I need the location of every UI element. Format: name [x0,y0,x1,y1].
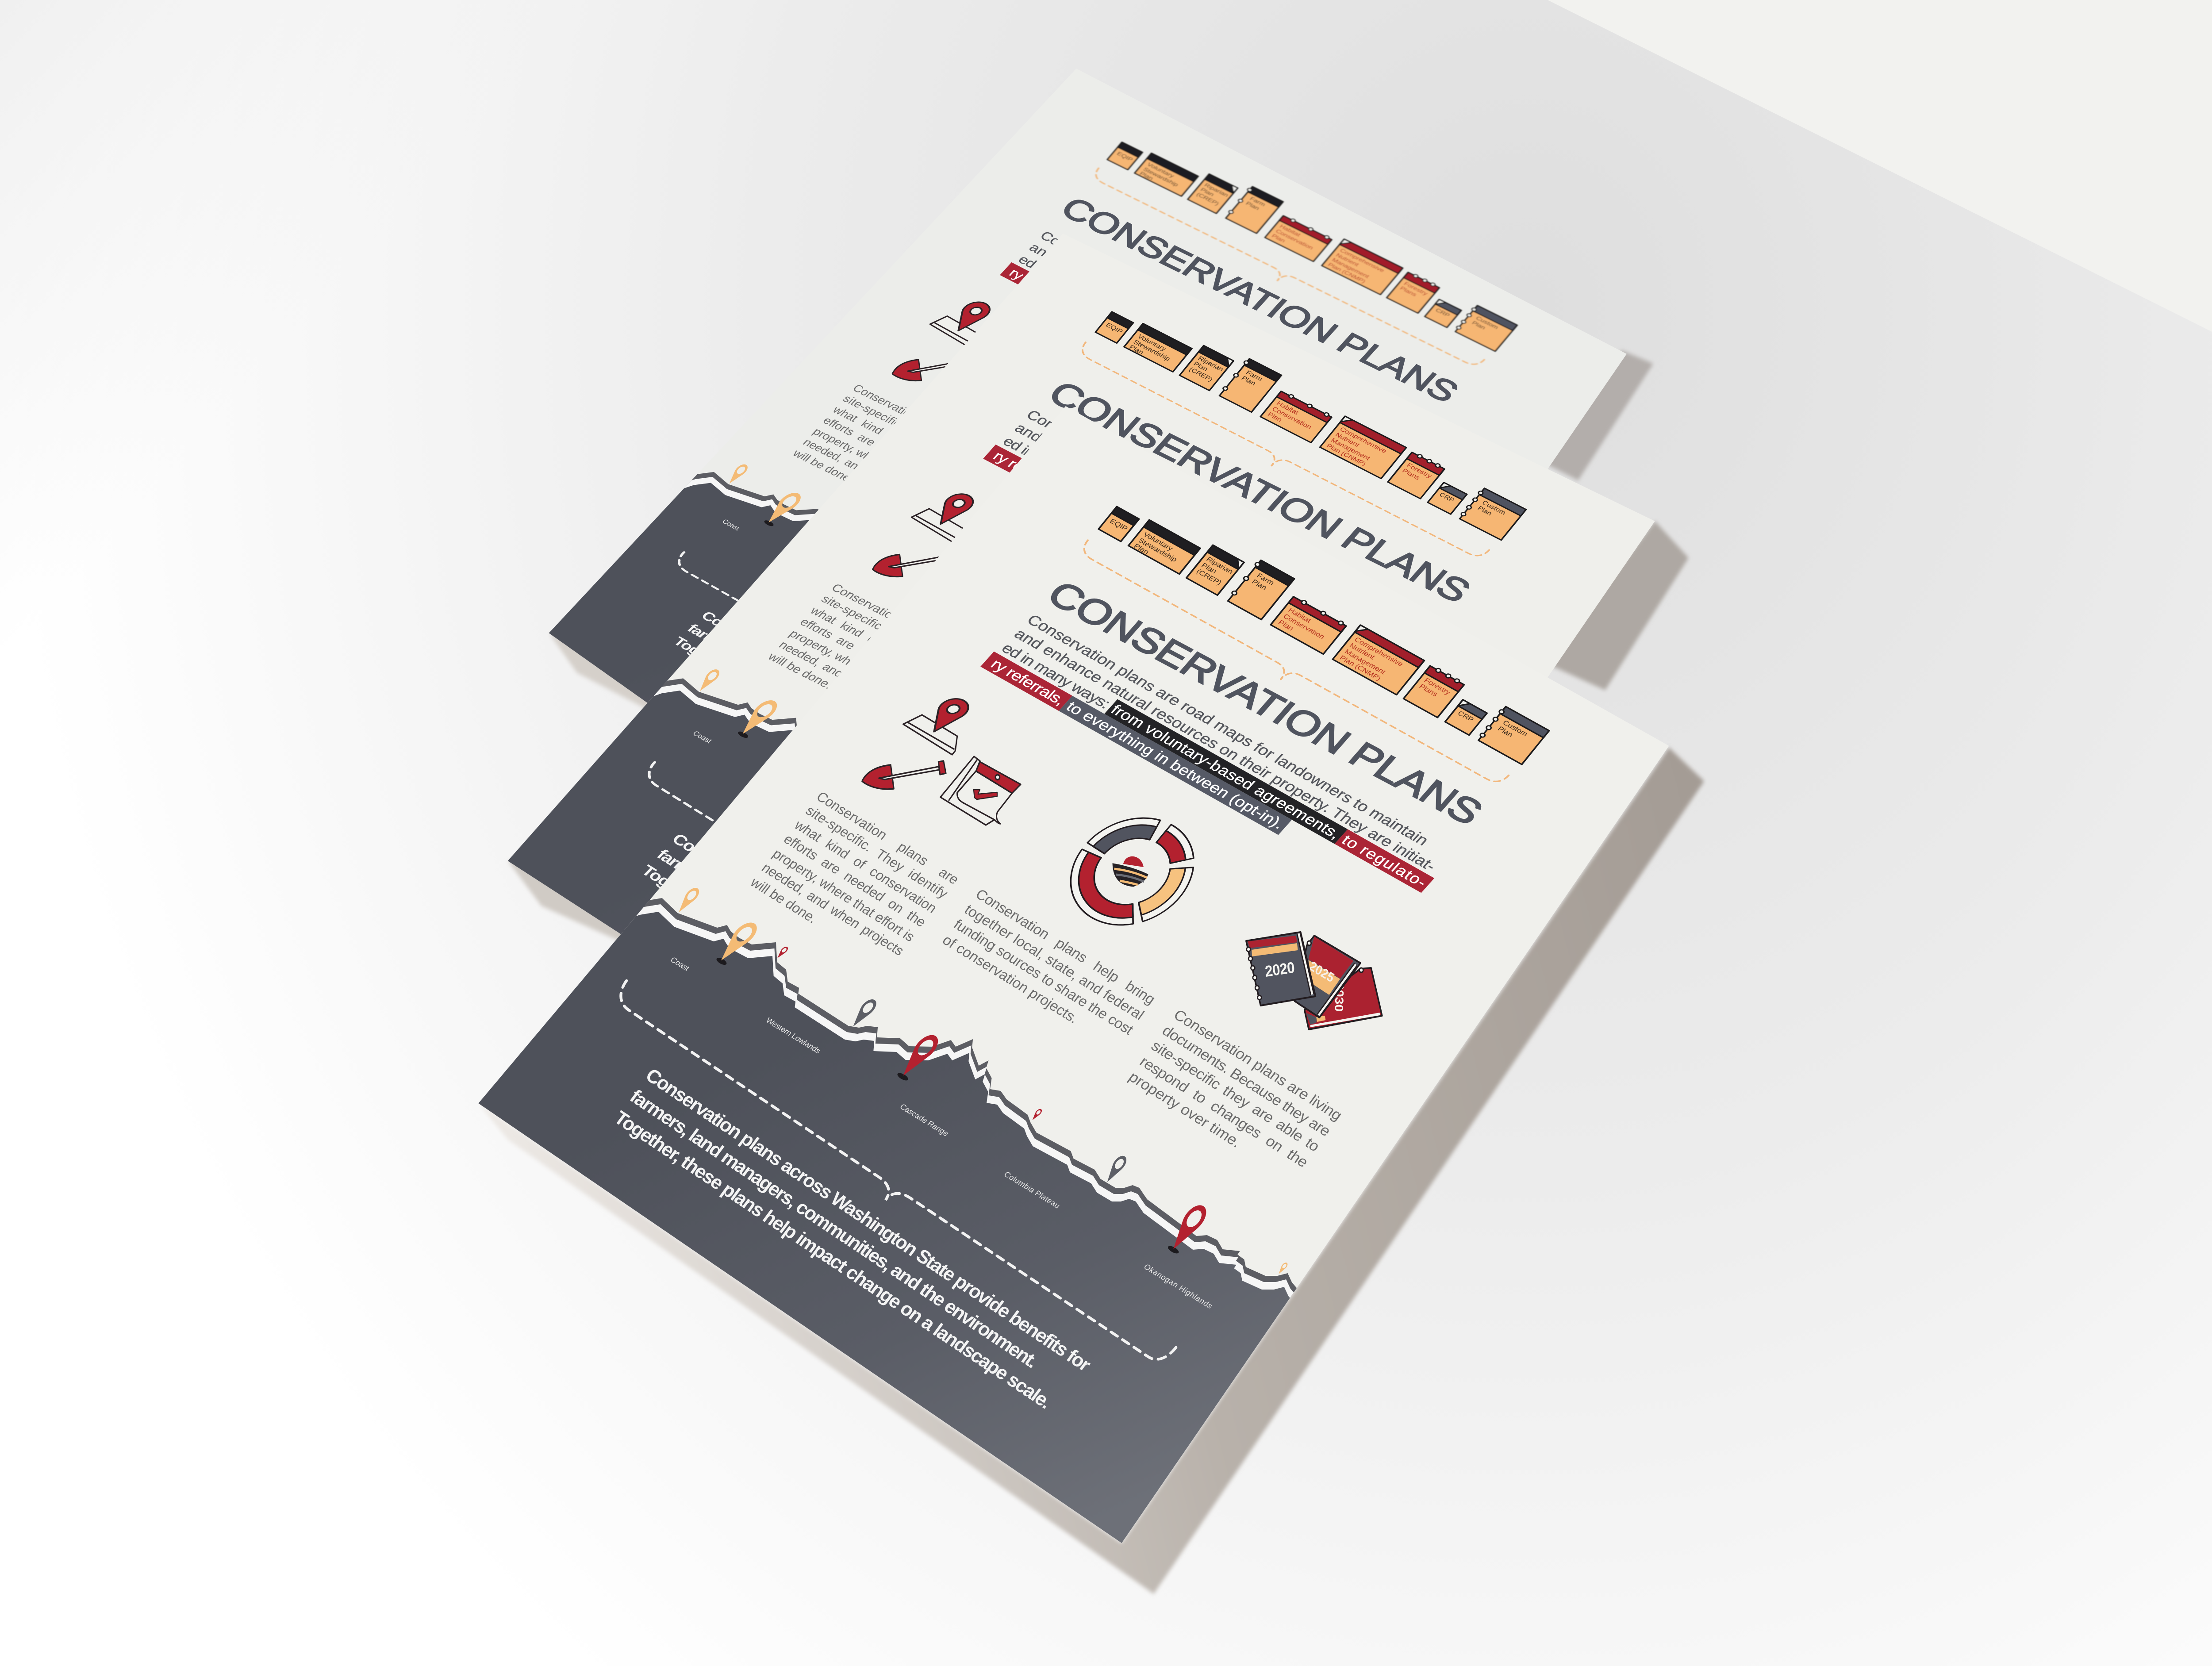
dashed bracket and closing text: farmers, land managers, communities, and the environment. [684,622,1057,835]
column three text: Conservation plans are living [1171,1006,1345,1124]
intro text: ry referrals, [990,449,1068,496]
plan documents: Comprehensive [1339,247,1386,273]
intro text: ed in many ways: [1015,252,1121,312]
column one text: what kind of conservation [807,604,951,682]
plan documents: Custom [1501,719,1529,738]
plan documents: CRP [1438,491,1456,504]
plan documents: Plans [1417,683,1440,698]
plan documents: Forestry [1405,462,1433,480]
column one text: efforts are needed on the [820,414,956,487]
column three text: site-specific they are able to [1148,1037,1323,1155]
plan documents: Conservation [1271,406,1313,430]
dashed bracket and closing text: farmers, land managers, communities, and the environment. [626,1086,1042,1372]
plan documents: Habitat [1275,400,1300,416]
stacked plan books icon: 2025 [1307,959,1336,986]
plan documents: Management [1331,257,1371,279]
dashed bracket and closing text: farmers, land managers, communities, and the environment. [653,846,1052,1099]
column one text: property, where that effort is [787,627,929,705]
plan documents: Riparian [1196,355,1225,373]
plan documents: Farm [1244,369,1264,383]
column one text [747,788,962,973]
plan documents: CRP [1456,709,1475,723]
plan documents: EQIP [1104,322,1124,335]
mountain band with map pins and region labels: Coast [669,955,691,973]
plan documents: Plan [1471,320,1487,330]
plan documents: (CREP) [1187,366,1214,383]
mountain band: Coast [721,518,741,532]
panel: middle poster [508,239,1655,934]
icons [872,491,1022,610]
mountain band with map pins and region labels [388,886,1370,1562]
intro text with highlights: ed in many ways: [998,640,1114,712]
stacked plan books icon: 2030 [1332,982,1346,1012]
intro text: and enhance natural resources on their property. They are initiat- [1026,240,1416,447]
dashed bracket and closing text: Together, these plans help impact change on a landscape scale. [670,634,1069,862]
plan documents: Plan [1244,200,1261,211]
intro text: ry referrals, [1006,266,1080,310]
plan documents: Habitat [1286,606,1313,624]
intro text: ed in many ways: [1000,434,1111,499]
mountain band [414,667,1394,1270]
column one text: needed, and when projects [800,436,937,508]
plan documents: Plan [1271,233,1287,243]
column three text: documents. Because they are [1159,1022,1334,1140]
intro text with highlights: to everything in between (opt-in). [1063,698,1288,832]
plan documents: Habitat [1279,223,1302,238]
column one text: property, where that effort is [769,846,918,944]
icons: stamp pin, shovel, calendar [862,695,1021,825]
column two text: Conservation plans help bring [973,886,1159,1007]
plan documents: Farm [1248,196,1267,207]
column one text: will be done. [790,447,857,485]
plan documents: Plan [1496,725,1515,738]
plan documents: (CREP) [1195,568,1223,587]
column one text: will be done. [765,650,836,691]
plan documents [1069,295,1531,571]
intro text: Conservation plans are road maps for landowners to maintain [1023,407,1419,621]
plan documents: Nutrient [1335,252,1360,268]
plan documents: Plans [1399,285,1418,298]
dashed bracket and closing text: Together, these plans help impact change on a landscape scale. [610,1107,1056,1413]
plan documents: Plan [1199,187,1215,197]
plan documents: Plan [1128,344,1145,356]
column one text: property, where that effort is [810,426,946,498]
plan documents: EQIP [1108,517,1129,532]
column one text [790,382,987,520]
intro text: Conservation plans are road maps for landowners to maintain [1037,228,1409,426]
donut chart icon [1046,800,1218,943]
plan documents: Plan [1132,542,1151,556]
plan documents: CRP [1434,307,1452,318]
plan documents: Forestry [1422,676,1452,696]
plan documents: Riparian [1203,182,1230,198]
plan documents: Plan [1240,375,1257,387]
panel: front poster [388,406,1669,1562]
icons [892,299,1038,412]
intro text with highlights: from voluntary-based agreements, [1107,701,1344,842]
plan documents: Stewardship [1137,537,1179,563]
column one text: will be done. [747,874,820,926]
plan documents: EQIP [1116,150,1134,162]
plan documents: Voluntary [1136,333,1167,353]
plan documents: Comprehensive [1353,636,1405,668]
title: CONSERVATION PLANS [1041,375,1479,610]
plan documents: (CREP) [1195,191,1221,207]
plan documents: Plan (CNMP) [1327,261,1367,284]
plan documents: Voluntary [1142,530,1175,553]
plan documents: Forestry [1403,280,1429,296]
column three text: respond to changes on the [1137,1053,1311,1171]
plan documents: Management [1329,437,1372,462]
column one text: needed, and when projects [759,860,907,959]
plan documents: Farm [1255,572,1276,587]
plan documents: Plan (CNMP) [1338,654,1382,682]
plan documents: Plan (CNMP) [1325,442,1367,468]
plan documents [1070,488,1555,798]
column three text [1125,1006,1345,1186]
mountain band with map pins and region labels: Okanogan Highlands [1142,1262,1214,1310]
panel: back poster [549,125,1627,703]
plan documents: Conservation [1282,612,1326,641]
plan documents: Nutrient [1334,431,1361,449]
column one text: needed, and when projects [776,638,919,717]
column one text: site-specific. They identify [818,592,961,671]
dashed bracket and closing text: Conservation plans across Washington State provide benefits for [641,1064,1095,1376]
dashed bracket and closing text [616,552,1176,891]
column three text: property over time. [1125,1069,1244,1151]
plan documents: Riparian [1205,555,1235,576]
plan documents: Custom [1481,499,1507,516]
plan documents: Plan [1266,411,1283,423]
dashed bracket and closing text: Together, these plans help impact change on a landscape scale. [638,862,1065,1132]
column one text: efforts are needed on the [797,615,940,694]
column one text: what kind of conservation [791,817,940,916]
column two text: of conservation projects. [940,932,1082,1026]
plan documents: Plan [1138,170,1155,181]
mountain band: Coast [691,729,714,745]
plan documents: Plan [1476,505,1494,517]
shadows of the posters [478,350,1704,1594]
plan documents: Plan [1200,561,1218,575]
plan documents: Voluntary [1146,161,1175,179]
plan documents: Nutrient [1348,642,1377,661]
column two text [940,886,1159,1053]
plan documents [1084,127,1522,377]
column one text: Conservation plans are [850,382,986,454]
column two text: funding sources to share the cost [951,916,1137,1038]
plan documents: Plan [1192,361,1209,372]
plan documents: Plan [1250,578,1269,591]
stacked plan books icon [1246,932,1382,1029]
column one text: site-specific. They identify [840,392,977,465]
stacked plan books icon: 2020 [1264,959,1296,980]
column one text: Conservation plans are [829,581,972,659]
dashed bracket and closing text [580,762,1181,1165]
plan documents: Comprehensive [1338,426,1388,454]
dashed bracket and closing text [550,981,1176,1451]
mountain band with map pins and region labels: Western Lowlands [764,1016,822,1055]
column one text: Conservation plans are [814,789,962,887]
column one text: site-specific. They identify [803,802,951,902]
plan documents: Plans [1401,468,1421,481]
mountain band with map pins and region labels: Columbia Plateau [1002,1170,1062,1210]
title: CONSERVATION PLANS [1039,574,1491,832]
plan documents: Custom [1475,315,1500,330]
title: CONSERVATION PLANS [1053,191,1466,409]
column one text [765,581,972,728]
column two text: together local, state, and federal [961,901,1148,1023]
plan documents: Stewardship [1142,166,1180,188]
column one text: what kind of conservation [830,403,966,476]
plan documents: Stewardship [1132,339,1171,362]
dashed bracket and closing text: Conservation plans across Washington State provide benefits for [668,830,1102,1105]
intro text with highlights: Conservation plans are road maps for landowners to maintain [1024,611,1432,848]
intro text: and enhance natural resources on their property. They are initiat- [1011,421,1427,644]
intro text with highlights: ry referrals, [987,656,1069,708]
mountain band with map pins and region labels: Cascade Range [898,1102,951,1138]
intro text with highlights: to regulato- [1338,832,1431,891]
dashed bracket and closing text: Conservation plans across Washington State provide benefits for [698,609,1104,841]
mountain band [464,458,1367,1011]
plan documents: Management [1343,648,1387,676]
farmland icon in donut centre [1113,856,1148,886]
column one text: efforts are needed on the [781,831,929,930]
plan documents: Plan [1277,618,1295,632]
plan documents: Conservation [1275,228,1315,250]
intro text with highlights: and enhance natural resources on their property. They are initiat- [1011,626,1440,874]
